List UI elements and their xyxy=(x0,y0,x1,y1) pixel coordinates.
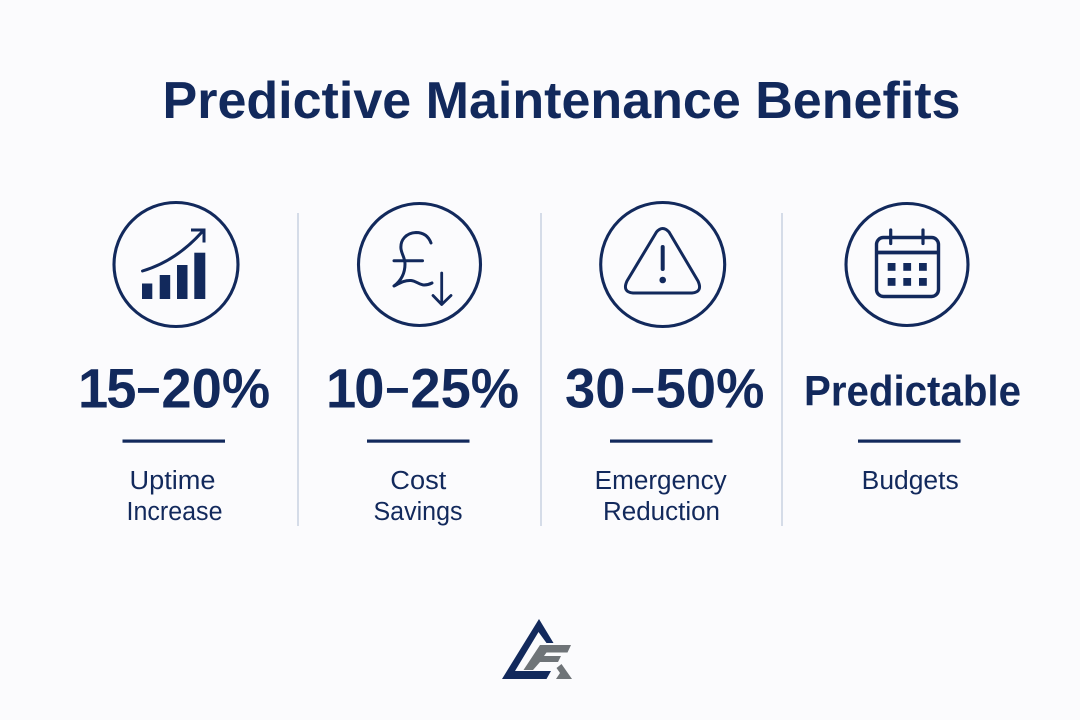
logo xyxy=(502,619,572,679)
stat: 10–25%: – xyxy=(386,364,409,411)
label: uptime increase: Uptime xyxy=(130,467,216,495)
title: Predictive Maintenance Benefits xyxy=(162,72,960,130)
panel: emergency reduction xyxy=(565,202,764,526)
label: emergency reduction: Emergency xyxy=(595,467,727,495)
icon: pound down arrow xyxy=(358,204,480,326)
stat: predictable: Predictable xyxy=(804,368,1021,416)
label: cost savings xyxy=(374,467,462,526)
stat: 30–50%: – xyxy=(631,364,654,411)
label: budgets: Budgets xyxy=(862,467,959,495)
label: uptime increase xyxy=(126,467,222,526)
stat: 10–25%: 10 xyxy=(326,357,383,420)
label: uptime increase: Increase xyxy=(126,498,222,526)
stat: 10–25%: 25% xyxy=(410,357,519,420)
icon: calendar xyxy=(846,204,968,326)
stat: 15–20%: 15 xyxy=(78,357,136,420)
label: emergency reduction xyxy=(595,467,727,526)
panel: uptime increase xyxy=(78,202,270,526)
icon: warning triangle xyxy=(601,202,725,326)
panel: predictable budgets xyxy=(804,204,1021,495)
panel: cost savings xyxy=(326,204,519,526)
stat: 15–20%: 20% xyxy=(161,357,270,420)
icon: rising bar chart xyxy=(114,202,238,326)
stat: 15–20%: – xyxy=(137,364,160,411)
label: cost savings: Cost xyxy=(390,467,446,495)
stat: 30–50%: 50% xyxy=(656,357,764,420)
label: cost savings: Savings xyxy=(374,498,462,526)
label: emergency reduction: Reduction xyxy=(603,498,720,526)
stat: 30–50%: 30 xyxy=(565,357,625,420)
